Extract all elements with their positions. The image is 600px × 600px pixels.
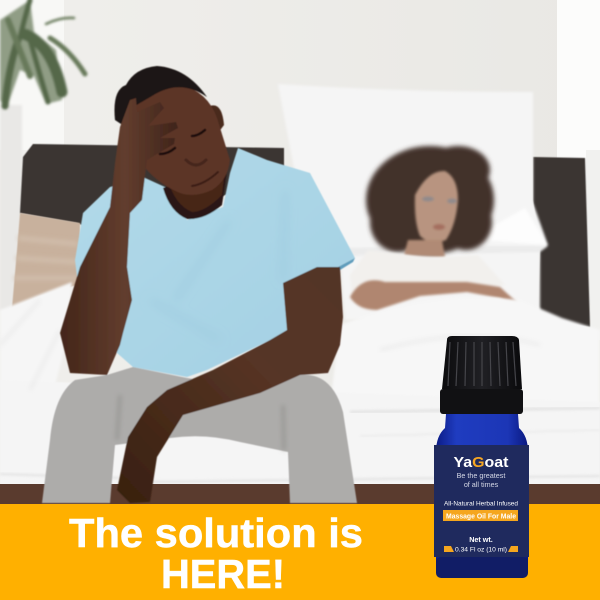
man ear [210, 105, 224, 133]
man hair [114, 66, 207, 126]
banner headline: The solution is [69, 510, 363, 556]
volume: 0.34 Fl oz (10 ml) [455, 546, 507, 554]
woman arm [350, 280, 522, 310]
tagline [457, 471, 505, 489]
net weight: Net wt. [469, 535, 493, 544]
man face [125, 84, 230, 195]
man t-shirt [75, 148, 355, 377]
man head [114, 66, 230, 195]
tagline: of all times [464, 480, 499, 489]
woman in bed [350, 146, 522, 310]
woman face [404, 171, 458, 257]
massage oil strip: Massage Oil For Male [446, 512, 516, 520]
man neck [163, 165, 228, 219]
duvet and mattress [0, 282, 600, 486]
product bottle [434, 336, 529, 578]
man legs [42, 367, 357, 503]
orange banner [0, 504, 600, 600]
man [42, 66, 357, 503]
tan pillow [12, 213, 80, 308]
banner headline [69, 510, 363, 597]
woman hair [366, 146, 494, 254]
bottle base shadow [436, 557, 528, 578]
headboard [20, 144, 590, 327]
bottle label [434, 445, 529, 557]
man lower arm and hand [117, 267, 343, 503]
plant [0, 0, 85, 110]
man eyes and mouth [160, 130, 218, 186]
bed base [0, 484, 600, 505]
woman t-shirt [350, 250, 505, 296]
product descriptor: All-Natural Herbal Infused [444, 500, 518, 508]
brand name: YaGoat [453, 454, 509, 471]
tagline: Be the greatest [457, 471, 505, 480]
white pillows [278, 84, 548, 320]
banner headline: HERE! [161, 551, 285, 597]
bottle cap [440, 336, 523, 414]
man raised arm and hand [60, 98, 178, 375]
bottle glass [436, 414, 528, 578]
